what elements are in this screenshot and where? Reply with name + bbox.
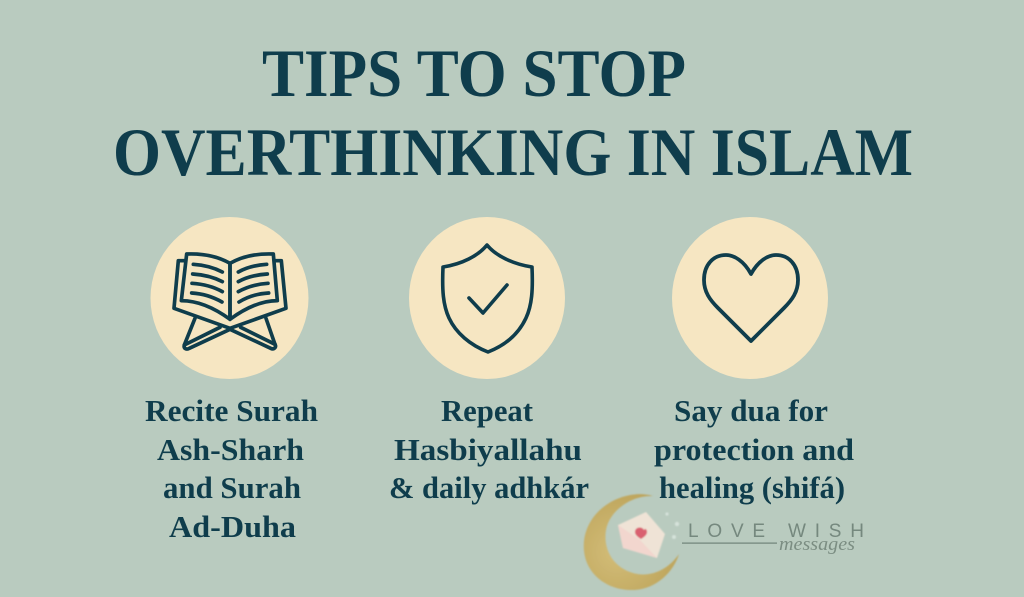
text: dua label: Say dua for: [674, 393, 828, 428]
title: OVERTHINKING IN ISLAM: [113, 114, 913, 190]
icon: sparkles: [665, 512, 679, 539]
icon: open book on stand: [150, 217, 308, 379]
icon: shield with check: [409, 217, 565, 379]
text: recite label: Recite Surah: [145, 393, 318, 428]
icon: heart: [672, 217, 828, 379]
text: dua label: protection and: [654, 432, 854, 467]
text: repeat label: & daily adhkár: [389, 470, 589, 505]
text: recite label: and Surah: [163, 470, 301, 505]
text: recite label: [145, 393, 318, 544]
text: love wish: LOVE WISH: [688, 521, 864, 542]
panel: recite surah: [145, 217, 318, 544]
text: dua label: healing (shifá): [659, 470, 845, 505]
title: [113, 35, 913, 190]
icon: envelope with heart: [618, 512, 665, 558]
title: TIPS TO STOP: [262, 35, 686, 111]
panel: say dua: [654, 217, 854, 505]
logo: love wish messages: [584, 494, 864, 590]
text: messages: messages: [779, 534, 855, 555]
text: recite label: Ad-Duha: [169, 509, 297, 544]
text: repeat label: Hasbiyallahu: [394, 432, 582, 467]
text: recite label: Ash-Sharh: [157, 432, 304, 467]
text: repeat label: Repeat: [441, 393, 534, 428]
text: repeat label: [389, 393, 589, 505]
panel: repeat hasbiyallahu: [389, 217, 589, 505]
icon: gold crescent: [584, 494, 679, 590]
text: dua label: [654, 393, 854, 505]
